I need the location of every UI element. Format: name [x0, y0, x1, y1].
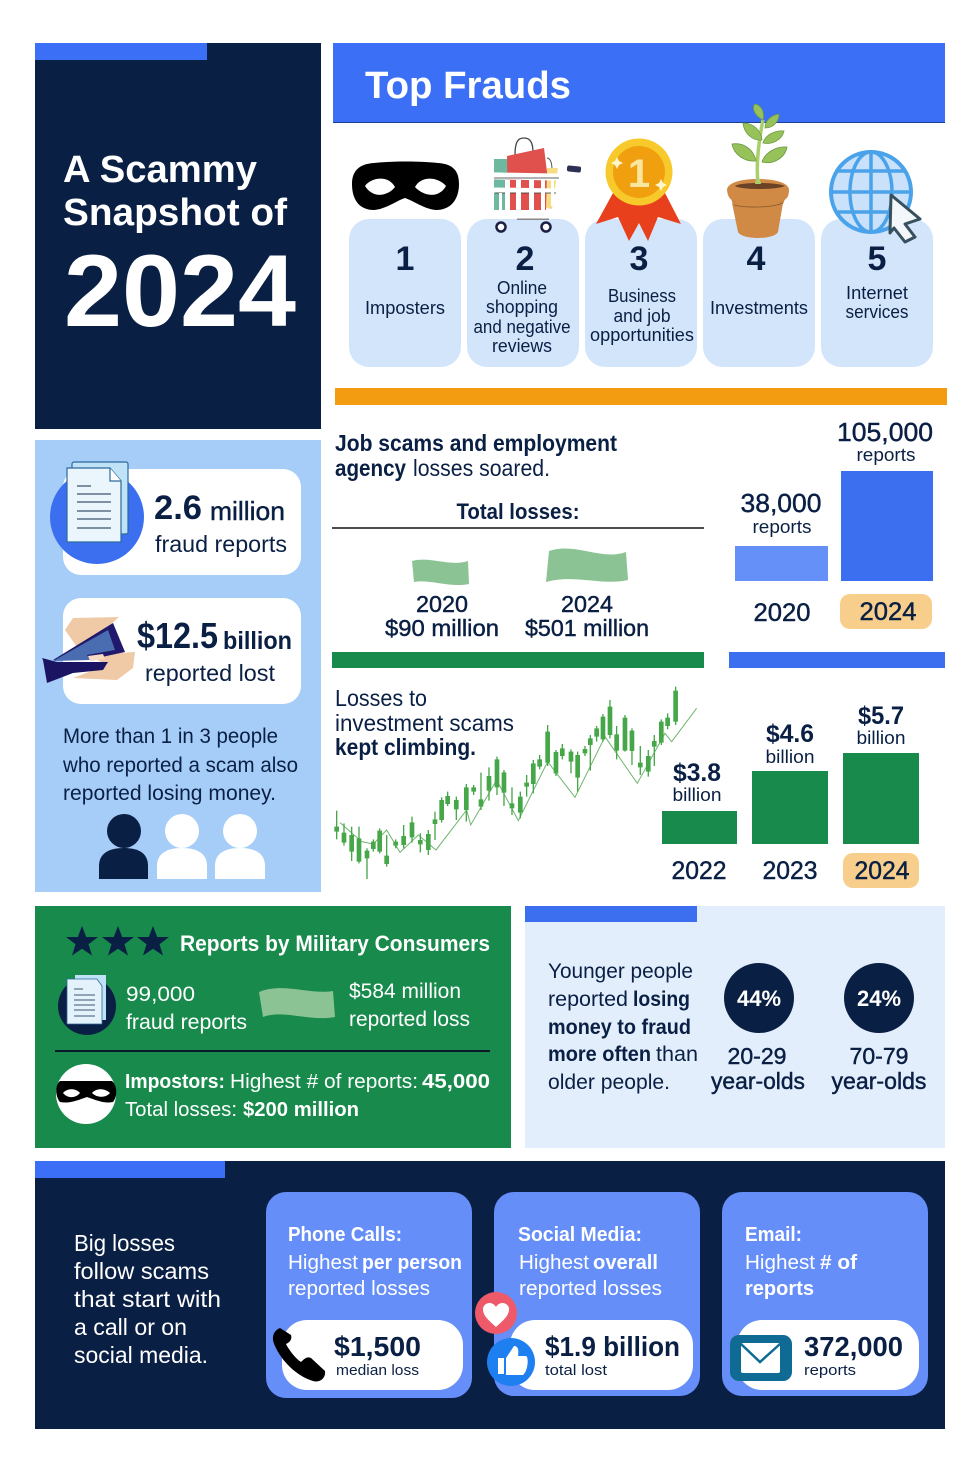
icon: black mask [352, 162, 459, 210]
card 3: business and job opportunities: Business [608, 286, 676, 306]
panel: top frauds header: Top Frauds [365, 65, 571, 107]
card: social media: Highest [519, 1252, 589, 1274]
bar chart: investment losses: $3.8 [673, 759, 721, 787]
panel: top frauds cards [349, 219, 933, 367]
card 1: imposters [349, 219, 461, 367]
card: fraud reports: million [210, 496, 285, 526]
text: big losses [74, 1230, 221, 1368]
text: 1 in 3 people: who reported a scam also [62, 754, 298, 777]
card: fraud reports [50, 462, 301, 575]
card 1: imposters: Imposters [365, 298, 445, 318]
card: phone calls: $1,500 [334, 1331, 421, 1362]
card: email: # of [820, 1252, 857, 1274]
bar chart: job scam reports: 38,000 [740, 488, 822, 518]
card: reported lost: billion [223, 627, 292, 655]
divider: blue bar [729, 652, 945, 668]
text: younger people reported: losing [633, 988, 690, 1011]
stat: 99,000 fraud reports: fraud reports [126, 1011, 247, 1034]
text: big losses: social media. [74, 1342, 208, 1368]
card: social media: $1.9 billion [545, 1331, 680, 1362]
heading: total losses: Total losses: [456, 499, 580, 524]
card 4: investments: Investments [710, 298, 808, 318]
card 5: internet services: 5 [868, 240, 886, 278]
bar chart: job scam reports: 105,000 [837, 417, 933, 447]
bar chart: investment losses: billion [856, 728, 906, 748]
card 2: online shopping: shopping [486, 297, 558, 317]
icon: thumbs up [487, 1338, 535, 1386]
card: email: reports [804, 1362, 856, 1379]
icon: heart reaction [475, 1292, 517, 1334]
card 3: business and job opportunities: and job [614, 306, 670, 326]
card: fraud reports: 2.6 [154, 489, 202, 527]
panel: contact methods [35, 1161, 945, 1429]
bar chart: investment losses: 2024 [854, 857, 910, 885]
text: impostors: Total losses: [125, 1099, 237, 1121]
text: impostors: $200 million [243, 1099, 359, 1121]
card 3: business and job opportunities: opportunities [590, 325, 694, 345]
card 2: online shopping: and negative [474, 317, 570, 337]
stat: 2024 losses: $501 million [525, 615, 649, 641]
heading: reports by military consumers: Reports by Military Consumers [180, 931, 490, 956]
icon: gold medal: 1 [628, 152, 650, 196]
card: social media: overall [593, 1252, 658, 1274]
card: social media [475, 1192, 700, 1396]
icon: gold medal [596, 138, 681, 241]
stat: 2020 losses [385, 560, 499, 641]
bar chart: investment losses: 2022 [672, 857, 726, 885]
text: job scams heading: losses soared. [413, 455, 550, 481]
text: 1 in 3 people: reported losing money. [63, 782, 276, 805]
stat: 2024 losses: 2024 [561, 591, 613, 617]
stat: 2020 losses: 2020 [416, 591, 468, 617]
bar chart: job scam reports: 2024 [860, 598, 917, 626]
card: phone calls: Highest [288, 1252, 358, 1274]
bar chart: job scam reports [735, 417, 933, 629]
stat: 44% 20-29 year-olds: 20-29 [728, 1043, 786, 1069]
stat: $584 million reported loss [349, 980, 470, 1031]
text: younger people reported: money to fraud [548, 1016, 691, 1039]
card 2: online shopping: 2 [516, 240, 534, 278]
bar chart: job scam reports: 2020 [754, 599, 810, 627]
card 4: investments [703, 219, 815, 367]
text: younger people reported: more often [548, 1043, 651, 1066]
icon: shopping cart [493, 138, 581, 232]
card 5: internet services [821, 219, 933, 367]
heading: A Scammy Snapshot of [63, 149, 287, 234]
stat: 99,000 fraud reports [126, 983, 247, 1034]
card: phone calls [266, 1192, 472, 1398]
text: younger people reported: Younger people [548, 960, 693, 983]
text: job scams heading: Job scams and employment [335, 430, 617, 456]
chart: candlestick chart [334, 687, 697, 879]
card 5: internet services: services [846, 302, 908, 322]
stat: $584 million reported loss: reported loss [349, 1008, 470, 1031]
text: younger people reported [548, 960, 698, 1094]
text: losses to investment scams: Losses to [335, 685, 427, 711]
text: impostors: Highest # of reports: [230, 1071, 418, 1093]
panel: military consumers [35, 906, 511, 1148]
text: 1 in 3 people: More than 1 in 3 people [63, 725, 278, 748]
icon: three people [99, 814, 265, 879]
bar chart: job scam reports: reports [856, 445, 916, 465]
text: 1 in 3 people [62, 725, 298, 805]
card: phone calls: per person [362, 1252, 462, 1274]
icon: mask in circle [56, 1064, 116, 1124]
icon: three stars [66, 926, 169, 956]
card: social media: total lost [545, 1362, 608, 1379]
card: email: reports [745, 1278, 814, 1300]
panel: overview stats [35, 440, 321, 892]
bar chart: investment losses [662, 702, 919, 888]
text: big losses: a call or on [74, 1314, 187, 1340]
panel: younger people [525, 906, 945, 1148]
stat: 2024 losses [525, 549, 649, 641]
icon: globe with cursor [831, 152, 920, 242]
icon: banknote [259, 988, 335, 1018]
card: email: Highest [745, 1252, 815, 1274]
text: impostors: 45,000 [422, 1071, 490, 1093]
section: job scams [332, 430, 704, 641]
card: social media: reported losses [519, 1278, 662, 1300]
text: younger people reported: older people. [548, 1071, 670, 1094]
bar chart: investment losses: $4.6 [766, 720, 814, 748]
text: big losses: follow scams [74, 1258, 209, 1284]
icon: phone [273, 1328, 325, 1381]
icon: potted plant [727, 104, 789, 238]
divider: green bar [332, 652, 704, 668]
card 2: online shopping [467, 219, 579, 367]
stat: 99,000 fraud reports: 99,000 [126, 983, 195, 1006]
text: younger people reported: than [656, 1043, 698, 1066]
card 1: imposters: 1 [396, 240, 414, 278]
card: phone calls: median loss [336, 1362, 419, 1379]
card 3: business and job opportunities [585, 219, 697, 367]
heading: 2024: 2024 [64, 234, 296, 348]
stat: 24% 70-79 year-olds: year-olds [832, 1068, 926, 1094]
stat: 24% 70-79 year-olds: 70-79 [850, 1043, 908, 1069]
stat: 24% 70-79 year-olds [832, 963, 926, 1094]
icon: document [58, 975, 116, 1035]
card: email [722, 1192, 928, 1396]
bar chart: investment losses: 2023 [762, 857, 818, 885]
card 5: internet services: Internet [846, 283, 908, 303]
stat: 44% 20-29 year-olds: year-olds [711, 1068, 805, 1094]
panel: top frauds header [333, 43, 945, 123]
text: losses to investment scams: investment scams [335, 710, 514, 736]
text: big losses: that start with [74, 1286, 221, 1312]
card: phone calls: reported losses [288, 1278, 430, 1300]
stat: 2020 losses: $90 million [385, 615, 499, 641]
card 3: business and job opportunities: 3 [630, 240, 648, 278]
bar chart: investment losses: billion [672, 785, 722, 805]
text: younger people reported: reported [548, 988, 628, 1011]
icon: envelope [730, 1335, 792, 1381]
card: reported lost: $12.5 [137, 615, 218, 656]
heading: A Scammy Snapshot of: A Scammy [63, 149, 257, 191]
card 2: online shopping: Online [497, 278, 547, 298]
text: losses to investment scams [335, 685, 514, 760]
text: losses to investment scams: kept climbing. [335, 734, 476, 760]
text: impostors [125, 1071, 490, 1121]
card 2: online shopping: reviews [492, 336, 552, 356]
card: social media: Social Media: [518, 1224, 642, 1246]
panel: title [35, 43, 321, 429]
stat: 24% 70-79 year-olds: 24% [857, 986, 901, 1011]
card: fraud reports: fraud reports [155, 531, 287, 557]
card 4: investments: 4 [747, 240, 766, 278]
card: reported lost: reported lost [145, 660, 276, 686]
stat: 44% 20-29 year-olds: 44% [737, 986, 781, 1011]
bar chart: investment losses: billion [766, 747, 814, 767]
text: impostors: Impostors: [125, 1071, 225, 1093]
card: email: 372,000 [804, 1331, 903, 1362]
stat: 44% 20-29 year-olds [711, 963, 805, 1094]
text: job scams heading [335, 430, 617, 481]
text: job scams heading: agency [335, 455, 406, 481]
bar chart: investment losses: $5.7 [858, 702, 904, 730]
card: phone calls: Phone Calls: [288, 1224, 402, 1246]
bar chart: job scam reports: reports [752, 517, 812, 537]
divider: orange bar [335, 388, 947, 405]
text: big losses: Big losses [74, 1230, 175, 1256]
card: email: Email: [745, 1224, 802, 1246]
card: reported lost [42, 598, 301, 704]
heading: A Scammy Snapshot of: Snapshot of [63, 192, 287, 234]
stat: $584 million reported loss: $584 million [349, 980, 461, 1003]
